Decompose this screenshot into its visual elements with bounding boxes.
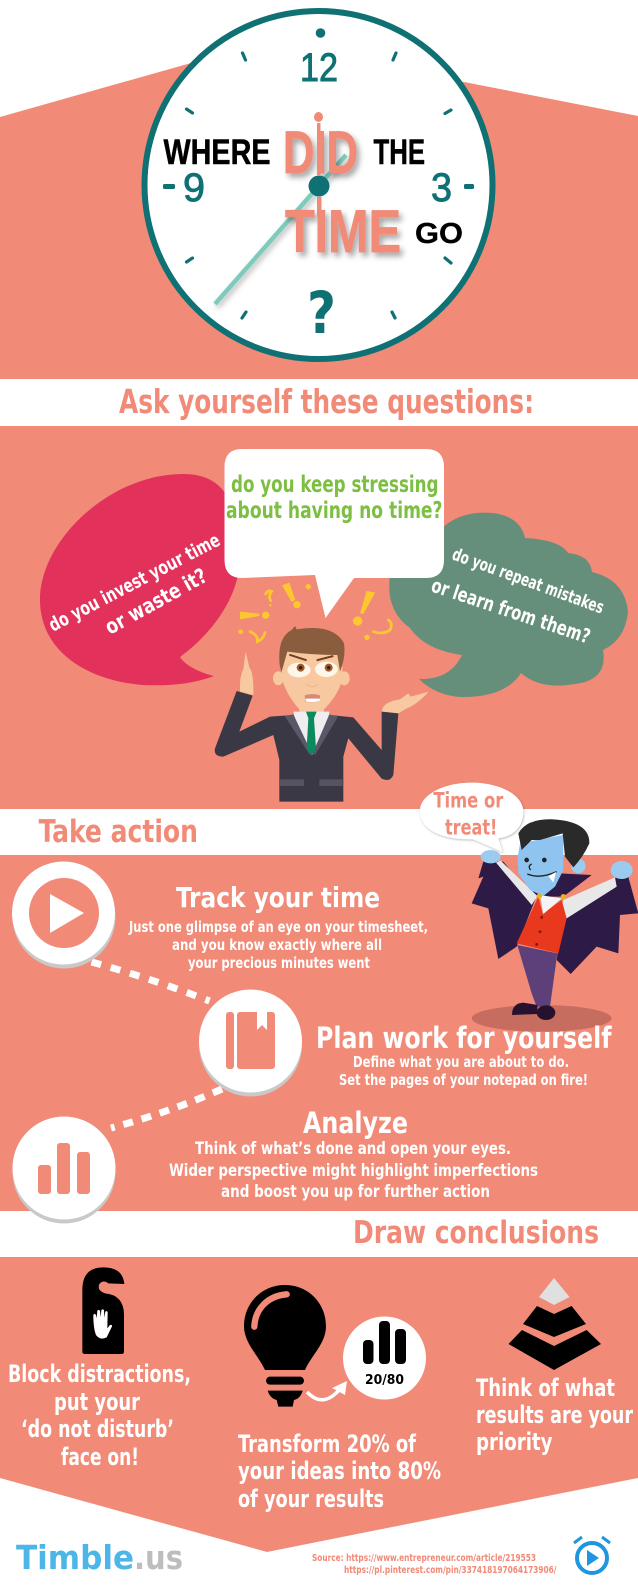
conclusion 2 text: your ideas into 80% bbox=[238, 1457, 441, 1485]
ground shadow bbox=[472, 1005, 612, 1032]
step 1 body: Just one glimpse of an eye on your timesheet, bbox=[128, 918, 428, 936]
title word GO: GO bbox=[415, 218, 463, 250]
speech bubble: time or treat bbox=[420, 783, 523, 852]
jacket bbox=[215, 691, 398, 802]
red vest bbox=[517, 897, 567, 953]
dashed connector 1 bbox=[92, 962, 210, 1001]
question mark: ? bbox=[307, 279, 336, 347]
step 1 body: your precious minutes went bbox=[188, 954, 370, 972]
logo: Timble.us: Timble bbox=[16, 1538, 134, 1577]
conclusion 3 text bbox=[476, 1374, 633, 1456]
icon: pyramid bbox=[508, 1278, 601, 1370]
tie bbox=[306, 712, 317, 756]
conclusion 1 text: put your bbox=[54, 1388, 140, 1416]
icon: timer logo bbox=[574, 1537, 610, 1573]
crimson bubble text line 2: or waste it? bbox=[101, 564, 211, 639]
step icon: bars bbox=[12, 1116, 116, 1224]
step 2 body: Define what you are about to do. bbox=[353, 1053, 569, 1071]
trousers bbox=[517, 945, 557, 1007]
conclusion 1 text bbox=[8, 1360, 191, 1471]
head bbox=[518, 835, 563, 896]
cloud text line 2: or learn from them? bbox=[428, 573, 593, 648]
heading: Ask yourself these questions: Ask yourself these questions: bbox=[119, 382, 534, 421]
step 3 heading: Analyze bbox=[303, 1106, 408, 1140]
20/80 label: 20/80 bbox=[365, 1372, 404, 1388]
conclusion 1 text: face on! bbox=[61, 1443, 139, 1471]
character: stressed businessman bbox=[215, 583, 429, 802]
hour hand bbox=[314, 112, 323, 217]
panel: conclusions salmon arrow band bbox=[0, 1257, 638, 1552]
character: vampire bbox=[420, 783, 638, 1032]
conclusion 1 text: ‘do not disturb’ bbox=[21, 1415, 174, 1443]
mouth bbox=[305, 694, 320, 703]
crimson bubble text: do you invest your time bbox=[45, 529, 224, 636]
logo: Timble.us: .us bbox=[134, 1538, 183, 1577]
bubble text line 2: treat! bbox=[445, 815, 497, 840]
step 2 heading: Plan work for yourself bbox=[316, 1021, 612, 1055]
hands and ear bbox=[481, 850, 633, 879]
numeral 3 with dash: 3 bbox=[431, 166, 452, 210]
step 3 body: Wider perspective might highlight imperfections bbox=[169, 1161, 538, 1181]
white bubble text: do you keep stressing bbox=[231, 472, 438, 498]
step 1 text bbox=[128, 881, 428, 972]
source credits: https://pl.pinterest.com/pin/337418197064173906/ bbox=[344, 1565, 557, 1576]
numeral 9 with dash bbox=[163, 166, 205, 210]
panel: questions salmon band bbox=[0, 426, 638, 809]
step 3 body bbox=[169, 1139, 538, 1202]
shirt bbox=[540, 895, 562, 914]
step 3 text bbox=[169, 1106, 538, 1202]
conclusion 1 text: Block distractions, bbox=[8, 1360, 191, 1388]
numeral 9 with dash: 9 bbox=[183, 166, 205, 210]
panel: header salmon banner bbox=[0, 63, 638, 379]
conclusion 2 text: Transform 20% of bbox=[238, 1430, 417, 1458]
cape bbox=[472, 862, 638, 974]
shirt bbox=[293, 712, 329, 754]
step 3 body: Think of what’s done and open your eyes. bbox=[195, 1139, 511, 1159]
dashed connector 2 bbox=[111, 1089, 222, 1128]
conclusion 2 text bbox=[238, 1430, 441, 1513]
numeral 12: 12 bbox=[300, 46, 338, 90]
step 2 body: Set the pages of your notepad on fire! bbox=[339, 1071, 588, 1089]
step 1 body bbox=[128, 918, 428, 972]
minute hand bbox=[215, 155, 346, 304]
step 3 body: and boost you up for further action bbox=[221, 1182, 490, 1202]
icon: light bulb bbox=[244, 1285, 326, 1407]
conclusion 2 text: of your results bbox=[238, 1485, 384, 1513]
skin: neck, hands, ears, face bbox=[240, 648, 429, 713]
step icon: play bbox=[12, 862, 116, 968]
heading: Take action: Take action bbox=[39, 814, 198, 850]
eyes bbox=[287, 655, 338, 677]
step icon: book bbox=[199, 990, 302, 1096]
logo: Timble.us bbox=[16, 1538, 183, 1577]
icon: door hanger bbox=[82, 1267, 124, 1354]
clock ticks bbox=[186, 53, 451, 318]
title word DID: DID bbox=[283, 119, 358, 186]
bubble text: Time or bbox=[433, 788, 504, 813]
title word WHERE: WHERE bbox=[164, 133, 270, 172]
step 1 heading: Track your time bbox=[176, 881, 380, 914]
speech bubble: crimson bbox=[40, 474, 240, 685]
source credits bbox=[312, 1553, 557, 1576]
nose bbox=[307, 684, 318, 687]
numeral 3 with dash bbox=[431, 166, 474, 210]
source credits: Source: https://www.entrepreneur.com/article/219553 bbox=[312, 1553, 536, 1564]
step 1 body: and you know exactly where all bbox=[172, 936, 382, 954]
face details bbox=[524, 858, 557, 883]
hair bbox=[279, 626, 344, 672]
vest buttons bbox=[535, 916, 543, 946]
lapels bbox=[285, 714, 312, 755]
speech bubble: green cloud bbox=[389, 513, 628, 697]
arrow: bulb to circle bbox=[307, 1381, 347, 1400]
step 2 body bbox=[339, 1053, 588, 1089]
title word TIME: TIME bbox=[285, 198, 401, 265]
collar clasps bbox=[537, 893, 566, 899]
conclusion 3 text: Think of what bbox=[476, 1374, 615, 1402]
speech bubble: white bbox=[224, 449, 444, 618]
hair bbox=[518, 819, 589, 867]
shoes bbox=[512, 1003, 555, 1020]
conclusion 3 text: priority bbox=[476, 1428, 552, 1456]
panel: take action salmon band bbox=[0, 855, 638, 1211]
clock face bbox=[144, 11, 492, 359]
heading: Draw conclusions: Draw conclusions bbox=[353, 1215, 599, 1251]
exclamation marks bbox=[238, 583, 391, 642]
white bubble text line 2: about having no time? bbox=[226, 498, 442, 524]
jacket pockets bbox=[280, 779, 343, 786]
sleeves bbox=[496, 861, 617, 918]
clock hub bbox=[308, 176, 330, 196]
icon: 20/80 circle bbox=[343, 1316, 426, 1400]
twelve o'clock dot bbox=[316, 28, 325, 38]
title word THE: THE bbox=[374, 133, 425, 172]
step 2 text bbox=[316, 1021, 612, 1089]
clock bbox=[144, 11, 492, 359]
